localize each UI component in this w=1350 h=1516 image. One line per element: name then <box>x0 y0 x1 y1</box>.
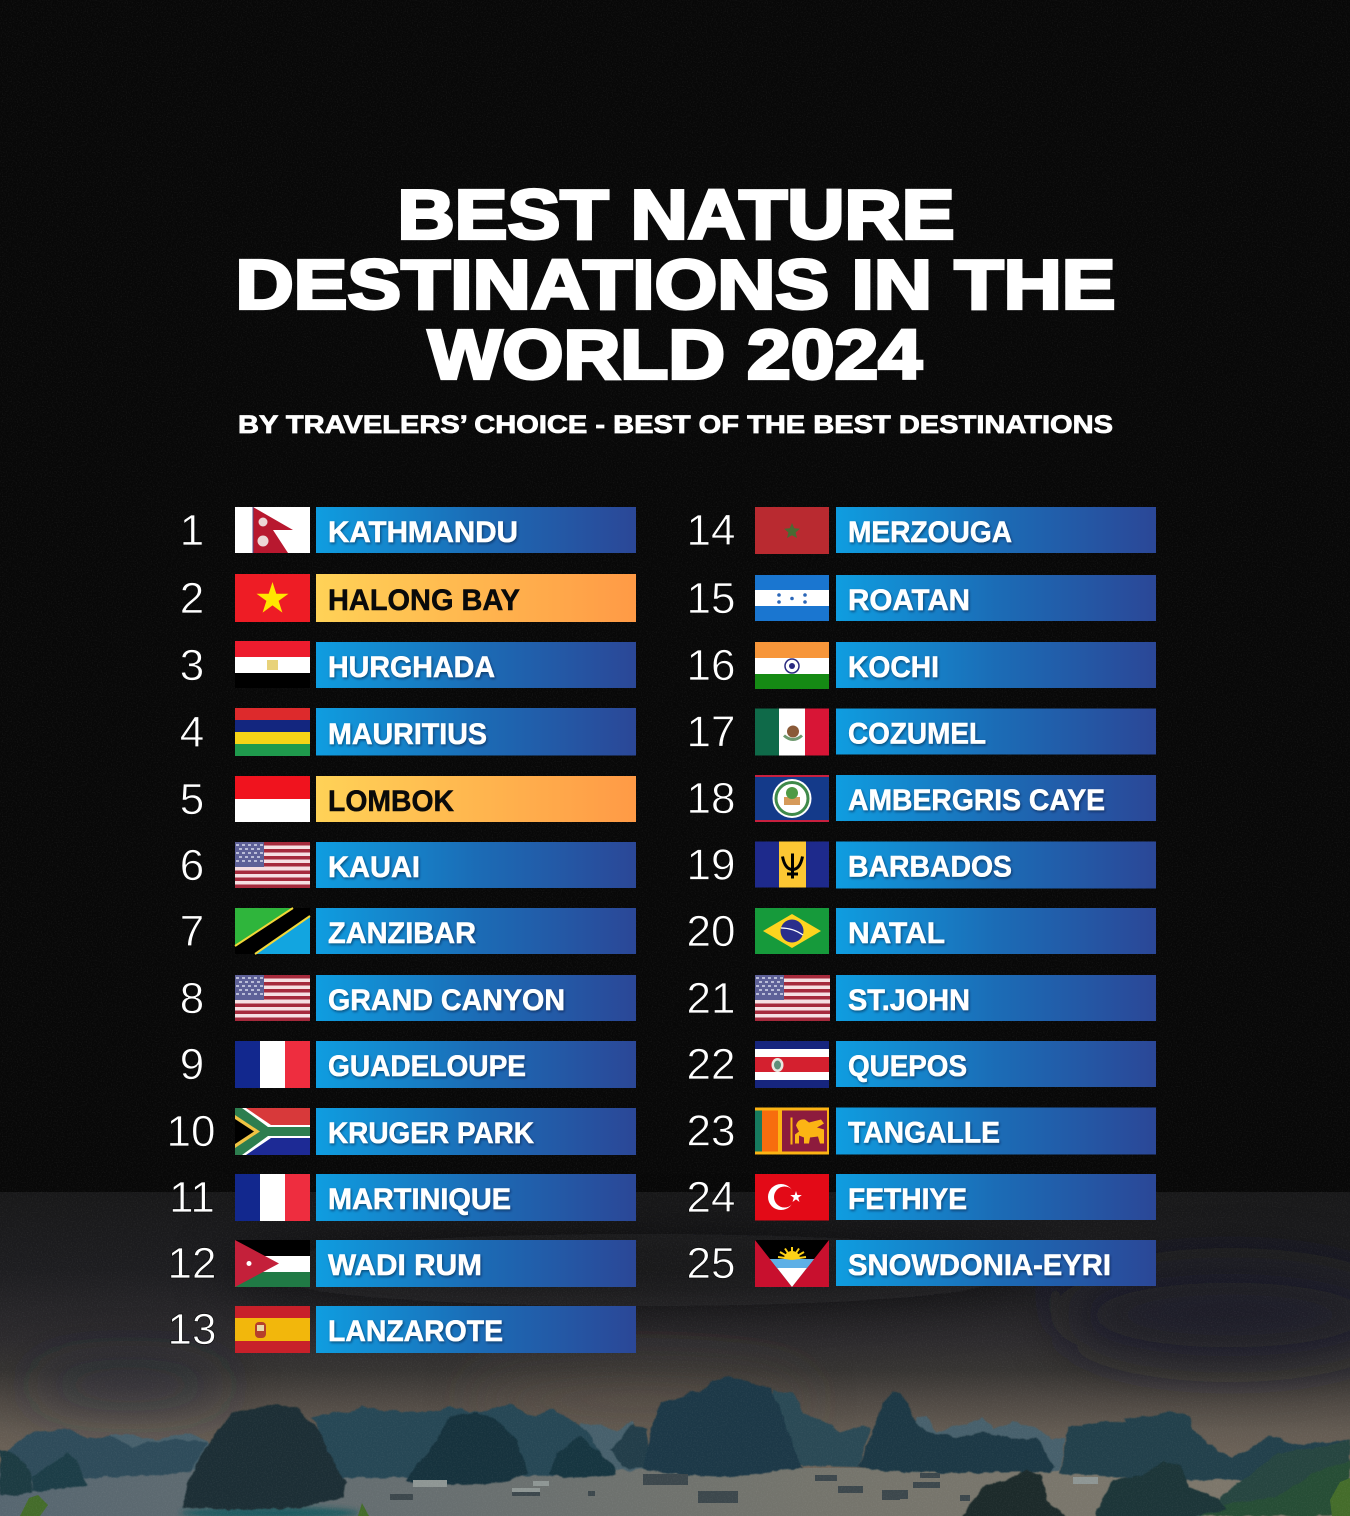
row 6 Kauai: 6 <box>180 841 204 890</box>
flag: Morocco <box>755 507 829 554</box>
flag: Indonesia <box>235 776 310 822</box>
row 4 Mauritius: 4 <box>180 708 204 757</box>
ridge behind central massif <box>770 1390 870 1467</box>
row 7 Zanzibar: ZANZIBAR <box>328 917 476 950</box>
row 20 Natal <box>687 907 1156 956</box>
flag: Turkey <box>755 1174 829 1220</box>
row 15 Roatan: 15 <box>687 574 735 623</box>
row 4 Mauritius <box>180 708 636 757</box>
row 19 Barbados: BARBADOS <box>848 850 1012 884</box>
row 3 Hurghada: HURGHADA <box>328 651 495 684</box>
row 16 Kochi <box>687 641 1156 690</box>
tower massif <box>858 1392 1055 1473</box>
palest distant peaks <box>110 1417 1065 1470</box>
flag: Egypt <box>235 641 310 688</box>
water <box>0 1468 1350 1516</box>
row 5 Lombok: LOMBOK <box>328 785 454 818</box>
row 14 Merzouga: 14 <box>687 506 735 555</box>
row 11 Martinique: MARTINIQUE <box>328 1183 511 1216</box>
row 10 Kruger Park <box>167 1107 636 1156</box>
row 9 Guadeloupe: GUADELOUPE <box>328 1050 526 1083</box>
row 7 Zanzibar <box>180 907 636 956</box>
foreground rock A <box>960 1470 1070 1516</box>
title: DESTINATIONS IN THE <box>236 246 1116 324</box>
row 12 Wadi Rum: WADI RUM <box>328 1249 482 1282</box>
flag: Mauritius <box>235 708 310 756</box>
row 21 St.John: 21 <box>687 974 735 1023</box>
row 14 Merzouga: MERZOUGA <box>848 516 1012 549</box>
right massif <box>1060 1411 1350 1490</box>
row 18 Ambergris Caye: 18 <box>687 774 735 823</box>
row 6 Kauai: KAUAI <box>328 851 420 884</box>
small island beside central massif <box>610 1423 650 1470</box>
row 10 Kruger Park: 10 <box>167 1107 215 1156</box>
row 16 Kochi: KOCHI <box>848 651 939 684</box>
row 1 Kathmandu: KATHMANDU <box>328 516 518 549</box>
row 2 Halong Bay: HALONG BAY <box>328 584 520 617</box>
title <box>236 176 1116 394</box>
title: BEST NATURE <box>398 176 954 254</box>
row 20 Natal: NATAL <box>848 917 945 950</box>
central massif <box>643 1377 802 1477</box>
foreground foliage <box>20 1478 1350 1516</box>
row 24 Fethiye: FETHIYE <box>848 1183 967 1216</box>
row 25 Snowdonia-Eyri: 25 <box>687 1239 735 1288</box>
row 11 Martinique: 11 <box>169 1173 215 1222</box>
flag: Barbados <box>755 842 829 888</box>
row 25 Snowdonia-Eyri <box>687 1239 1156 1288</box>
flag: Sri Lanka <box>755 1108 829 1154</box>
row 18 Ambergris Caye: AMBERGRIS CAYE <box>848 784 1105 817</box>
row 18 Ambergris Caye <box>687 774 1156 823</box>
flag: South Africa <box>235 1108 310 1155</box>
row 16 Kochi: 16 <box>687 641 735 690</box>
row 8 Grand Canyon: 8 <box>180 974 204 1023</box>
flag: Spain <box>235 1306 310 1353</box>
right ranking column <box>687 506 1156 1288</box>
row 23 Tangalle: 23 <box>687 1106 735 1156</box>
row 22 Quepos <box>687 1040 1156 1089</box>
flag: India <box>755 642 829 689</box>
row 22 Quepos: 22 <box>687 1040 735 1089</box>
second rock <box>406 1412 528 1485</box>
flag: Antigua and Barbuda <box>755 1240 829 1287</box>
row 15 Roatan: ROATAN <box>848 584 970 617</box>
row 2 Halong Bay: 2 <box>180 574 204 623</box>
boats <box>390 1473 1098 1503</box>
row 19 Barbados <box>687 840 1156 890</box>
row 12 Wadi Rum: 12 <box>168 1239 216 1288</box>
left ranking column <box>167 506 636 1354</box>
row 5 Lombok: 5 <box>180 775 204 824</box>
row 5 Lombok <box>180 775 636 824</box>
subtitle: BY TRAVELERS’ CHOICE - BEST OF THE BEST DESTINATIONS <box>238 411 1113 439</box>
row 25 Snowdonia-Eyri: SNOWDONIA-EYRI <box>848 1249 1111 1282</box>
row 13 Lanzarote: 13 <box>168 1305 216 1354</box>
back ridge behind big rock <box>312 1404 612 1478</box>
row 9 Guadeloupe <box>180 1040 636 1089</box>
row 14 Merzouga <box>687 506 1156 555</box>
third rock <box>548 1437 616 1478</box>
flag: Mexico <box>755 708 829 756</box>
row 22 Quepos: QUEPOS <box>848 1050 967 1083</box>
flag: USA <box>235 842 310 888</box>
row 13 Lanzarote: LANZAROTE <box>328 1315 503 1348</box>
title: WORLD 2024 <box>428 316 922 394</box>
row 8 Grand Canyon <box>180 974 636 1023</box>
row 11 Martinique <box>169 1173 636 1222</box>
row 3 Hurghada: 3 <box>180 641 204 690</box>
row 1 Kathmandu: 1 <box>180 506 204 555</box>
flag: Honduras <box>755 575 829 621</box>
karst islands <box>0 1377 1350 1516</box>
row 24 Fethiye: 24 <box>687 1173 735 1222</box>
row 13 Lanzarote <box>168 1305 636 1354</box>
flag: Belize <box>755 775 829 822</box>
green ridge <box>1220 1440 1350 1516</box>
row 2 Halong Bay <box>180 574 636 623</box>
row 3 Hurghada <box>180 641 636 690</box>
row 6 Kauai <box>180 841 636 890</box>
row 1 Kathmandu <box>180 506 636 555</box>
flag: France <box>235 1174 310 1221</box>
row 19 Barbados: 19 <box>687 840 735 890</box>
flag: Tanzania <box>235 908 310 954</box>
row 17 Cozumel <box>687 708 1156 756</box>
row 23 Tangalle: TANGALLE <box>848 1116 1000 1150</box>
left rocks <box>0 1450 33 1496</box>
row 7 Zanzibar: 7 <box>180 907 204 956</box>
row 10 Kruger Park: KRUGER PARK <box>328 1117 534 1150</box>
row 23 Tangalle <box>687 1106 1156 1156</box>
row 21 St.John <box>687 974 1156 1023</box>
row 9 Guadeloupe: 9 <box>180 1040 204 1089</box>
row 24 Fethiye <box>687 1173 1156 1222</box>
big rock <box>183 1403 346 1510</box>
row 17 Cozumel: 17 <box>687 708 735 756</box>
foreground rock B <box>1097 1462 1227 1516</box>
flag: USA <box>235 975 310 1021</box>
row 15 Roatan <box>687 574 1156 623</box>
row 4 Mauritius: MAURITIUS <box>328 718 487 751</box>
flag: Vietnam <box>235 574 310 622</box>
flag: Costa Rica <box>755 1041 829 1088</box>
far left ridge <box>0 1429 207 1480</box>
row 8 Grand Canyon: GRAND CANYON <box>328 984 565 1017</box>
flag: Jordan <box>235 1240 310 1287</box>
row 12 Wadi Rum <box>168 1239 636 1288</box>
row 17 Cozumel: COZUMEL <box>848 718 986 750</box>
row 20 Natal: 20 <box>687 907 735 956</box>
row 21 St.John: ST.JOHN <box>848 984 970 1017</box>
flag: Brazil <box>755 908 829 954</box>
flag: France <box>235 1041 310 1088</box>
flag: Nepal <box>235 507 310 553</box>
flag: USA <box>755 975 830 1021</box>
background photo: Halong Bay karst landscape <box>0 1192 1350 1516</box>
